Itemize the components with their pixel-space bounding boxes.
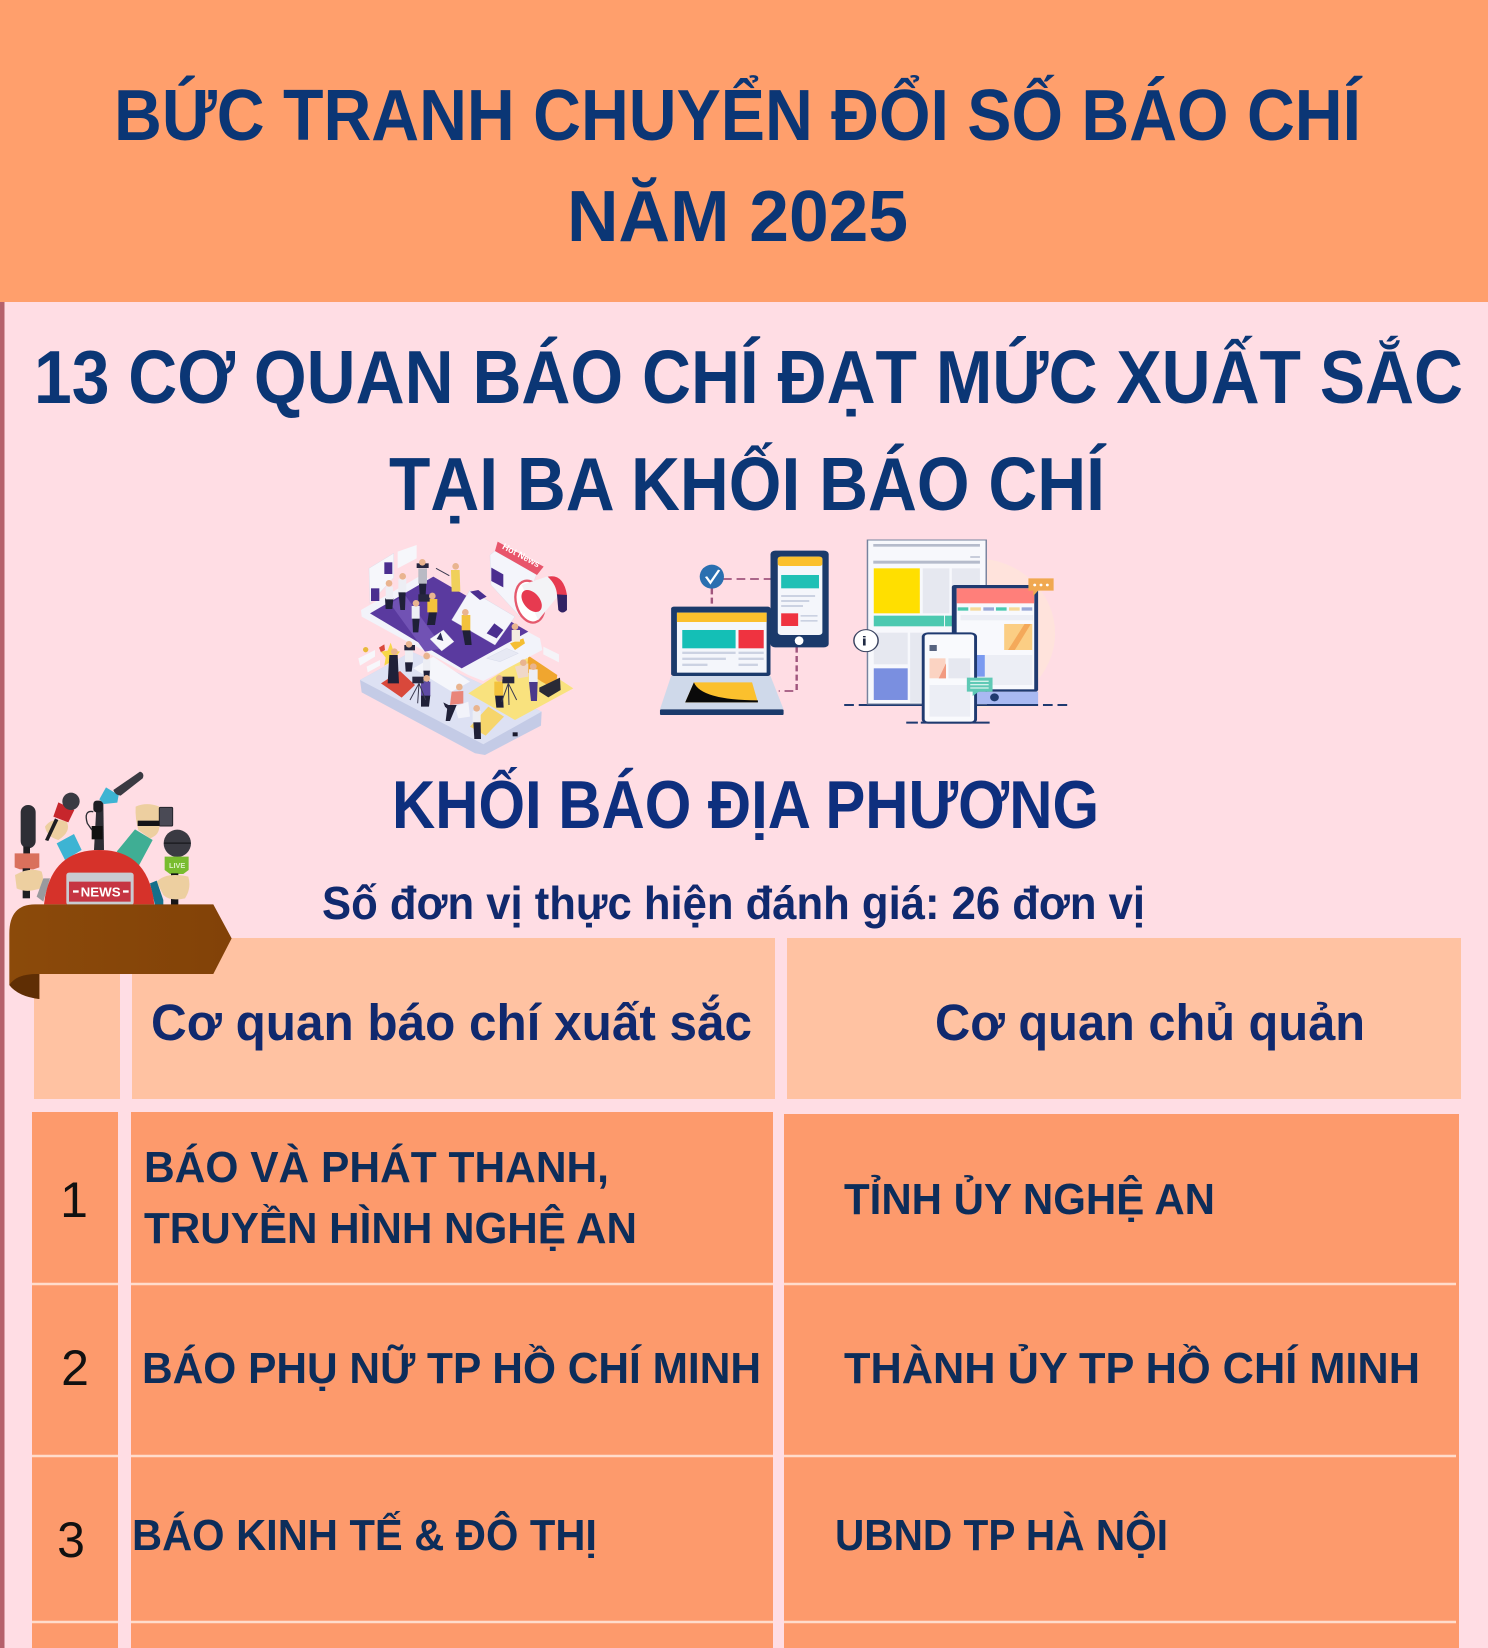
header banner xyxy=(0,0,1488,302)
row 2: 2 xyxy=(61,1340,89,1396)
title xyxy=(114,74,1363,257)
newspaper and megaphone: Hot News xyxy=(501,541,542,569)
row 3 xyxy=(57,1509,1168,1568)
lower phone xyxy=(358,643,573,755)
row 2: BÁO PHỤ NỮ TP HỒ CHÍ MINH xyxy=(142,1343,761,1393)
row 2 xyxy=(61,1340,1420,1396)
header label: governing body: Cơ quan chủ quản xyxy=(935,994,1365,1051)
row 1: 1 xyxy=(60,1172,88,1228)
icon: news podium with microphones xyxy=(9,772,232,999)
row 1: BÁO VÀ PHÁT THANH, xyxy=(144,1142,609,1192)
unit count: Số đơn vị thực hiện đánh giá: 26 đơn vị xyxy=(322,877,1145,929)
icon: news podium with microphones: NEWS xyxy=(81,885,121,900)
row 2: THÀNH ỦY TP HỒ CHÍ MINH xyxy=(844,1342,1420,1393)
table rows xyxy=(32,1112,1459,1648)
row 1 xyxy=(60,1142,1215,1253)
illustration: newspaper, tablet and phone: i xyxy=(862,634,867,649)
header label: outstanding agency: Cơ quan báo chí xuất sắc xyxy=(151,993,752,1051)
row 3: BÁO KINH TẾ & ĐÔ THỊ xyxy=(132,1509,597,1560)
heading: 13 agencies xyxy=(34,335,1463,526)
row 3: UBND TP HÀ NỘI xyxy=(835,1509,1168,1560)
heading: 13 agencies: TẠI BA KHỐI BÁO CHÍ xyxy=(389,442,1107,526)
newspaper and megaphone xyxy=(369,541,567,626)
row 1: TRUYỀN HÌNH NGHỆ AN xyxy=(144,1203,637,1253)
upper phone xyxy=(361,575,542,681)
table header xyxy=(34,938,1461,1099)
row 3: 3 xyxy=(57,1512,85,1568)
section heading: KHỐI BÁO ĐỊA PHƯƠNG xyxy=(392,766,1099,843)
icon: news podium with microphones: LIVE xyxy=(169,861,185,870)
title: NĂM 2025 xyxy=(567,177,908,257)
title: BỨC TRANH CHUYỂN ĐỔI SỐ BÁO CHÍ xyxy=(114,74,1363,156)
illustration: newspaper, tablet and phone xyxy=(844,540,1067,723)
people xyxy=(385,559,538,739)
illustration: laptop and phone xyxy=(660,551,829,715)
illustration: isometric newsroom on phones xyxy=(358,541,573,755)
row 1: TỈNH ỦY NGHỆ AN xyxy=(844,1173,1215,1224)
